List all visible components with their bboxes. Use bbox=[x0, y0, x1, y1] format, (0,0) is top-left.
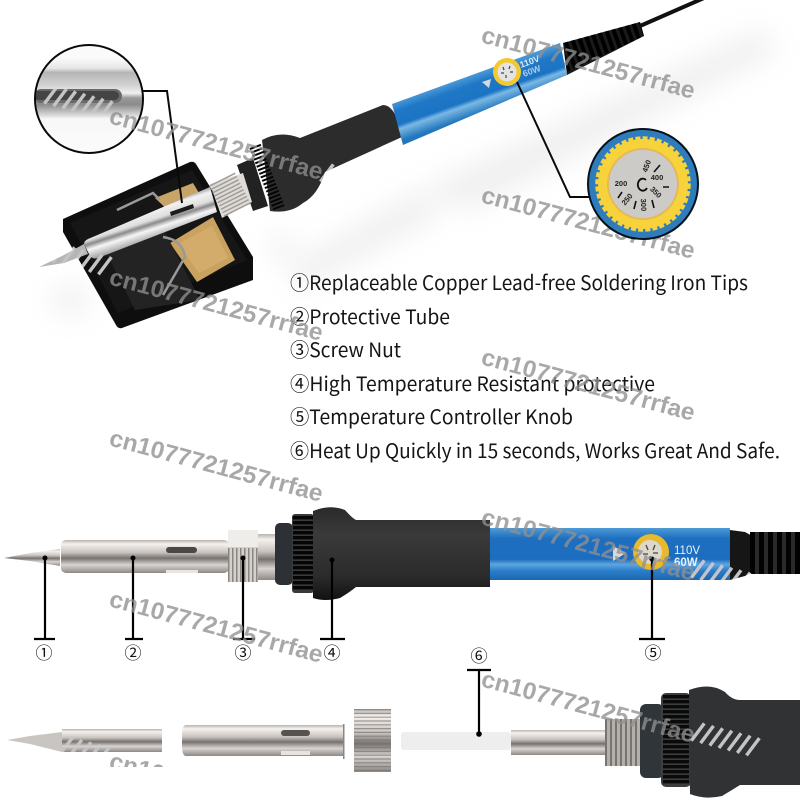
feature 6: ⑥Heat Up Quickly in 15 seconds, Works Great And Safe. bbox=[290, 435, 780, 464]
exploded view bbox=[7, 642, 800, 798]
stand tray bbox=[63, 162, 253, 328]
assembled tip bbox=[4, 549, 60, 566]
white ceramic tube bbox=[401, 732, 511, 750]
dial scale: 200 bbox=[615, 179, 627, 188]
callout 4: ④ bbox=[324, 639, 340, 664]
front nose bbox=[237, 158, 268, 211]
power cord bbox=[640, 0, 704, 26]
watermark left 4: cn1077721257rrfae bbox=[106, 586, 326, 669]
slots bbox=[166, 547, 197, 553]
watermark right 5: cn1077721257rrfae bbox=[478, 666, 698, 749]
assembled ribs bbox=[292, 514, 314, 593]
callout 6: ⑥ bbox=[470, 642, 488, 667]
assembled strain relief bbox=[750, 532, 800, 574]
loose tip bbox=[7, 729, 162, 752]
callout 3 bbox=[233, 556, 255, 664]
callout 1: ① bbox=[36, 639, 52, 664]
dial scale: 400 bbox=[651, 173, 663, 182]
voltage label on top iron bbox=[518, 53, 543, 79]
assembled iron side view bbox=[4, 507, 800, 600]
small dial bbox=[493, 58, 521, 86]
blue tube bbox=[392, 43, 567, 145]
callout 5: ⑤ bbox=[644, 639, 662, 664]
feature 3: ③Screw Nut bbox=[290, 334, 401, 363]
watermark left 1: cn1077721257rrfae bbox=[106, 103, 326, 186]
small arrow bbox=[482, 79, 491, 88]
callouts bbox=[34, 556, 665, 664]
exploded ribs bbox=[661, 693, 691, 787]
watermark right 4: cn1077721257rrfae bbox=[478, 504, 698, 587]
loose nut bbox=[354, 709, 391, 772]
thread bbox=[605, 719, 641, 766]
assembled nose bbox=[275, 523, 293, 585]
loose tube bbox=[182, 724, 344, 759]
tube slot bbox=[170, 204, 194, 216]
callout 5 bbox=[639, 556, 665, 664]
assembled arrow bbox=[613, 546, 626, 561]
assembled rear collar bbox=[730, 530, 756, 580]
assembled voltage label bbox=[674, 545, 700, 569]
sponge bbox=[170, 217, 235, 282]
dial scale: 250 bbox=[620, 192, 635, 207]
callout 4 bbox=[320, 558, 345, 664]
feature 2: ②Protective Tube bbox=[290, 301, 450, 330]
soft shadow of the iron bbox=[52, 30, 780, 316]
strain relief bbox=[562, 22, 645, 75]
dial scale: 350 bbox=[648, 185, 663, 200]
protective tube on top iron bbox=[84, 187, 217, 258]
screw nut bbox=[210, 173, 252, 218]
watermark right 3: cn1077721257rrfae bbox=[478, 344, 698, 427]
callout 1 bbox=[34, 556, 55, 664]
voltage label on top iron: 110V bbox=[518, 53, 541, 70]
feature 4: ④High Temperature Resistant protective bbox=[290, 368, 655, 397]
exploded nose bbox=[640, 704, 664, 778]
magnifier leader line bbox=[143, 91, 182, 203]
callout 6 bbox=[467, 642, 491, 737]
assembled protective tube bbox=[61, 540, 229, 573]
assembled voltage label: 110V bbox=[674, 545, 700, 557]
watermark right 1: cn1077721257rrfae bbox=[478, 22, 698, 105]
assembled voltage label: 60W bbox=[674, 557, 698, 569]
dial scale: 450 bbox=[640, 159, 653, 174]
watermark right 2: cn1077721257rrfae bbox=[478, 182, 698, 265]
magnifier callout: tube slot bbox=[30, 45, 182, 203]
handle bbox=[262, 105, 402, 212]
dial leader line bbox=[517, 82, 592, 197]
feature 5: ⑤Temperature Controller Knob bbox=[290, 401, 573, 430]
ribbed ring bbox=[255, 146, 279, 208]
callout 3: ③ bbox=[234, 639, 252, 664]
assembled nut bbox=[228, 530, 258, 582]
assembled dial bbox=[633, 534, 669, 570]
feature list bbox=[290, 267, 780, 464]
assembled neck bbox=[258, 534, 275, 580]
callout 2: ② bbox=[124, 639, 142, 664]
temperature dial magnifier bbox=[588, 129, 698, 239]
tip on top iron bbox=[39, 244, 88, 267]
feature 1: ①Replaceable Copper Lead-free Soldering Iron Tips bbox=[290, 267, 748, 296]
callout 2 bbox=[124, 556, 143, 664]
voltage label on top iron: 60W bbox=[521, 63, 543, 79]
assembled handle bbox=[313, 507, 490, 600]
dial scale bbox=[615, 159, 669, 211]
assembled blue tube bbox=[490, 528, 730, 580]
watermark left 2: cn1077721257rrfae bbox=[106, 264, 326, 347]
watermark left 3: cn1077721257rrfae bbox=[106, 425, 326, 508]
dial scale: 300 bbox=[639, 199, 648, 211]
top soldering iron on stand bbox=[39, 0, 704, 328]
metal heater tube bbox=[511, 730, 605, 755]
exploded handle bbox=[689, 686, 800, 798]
